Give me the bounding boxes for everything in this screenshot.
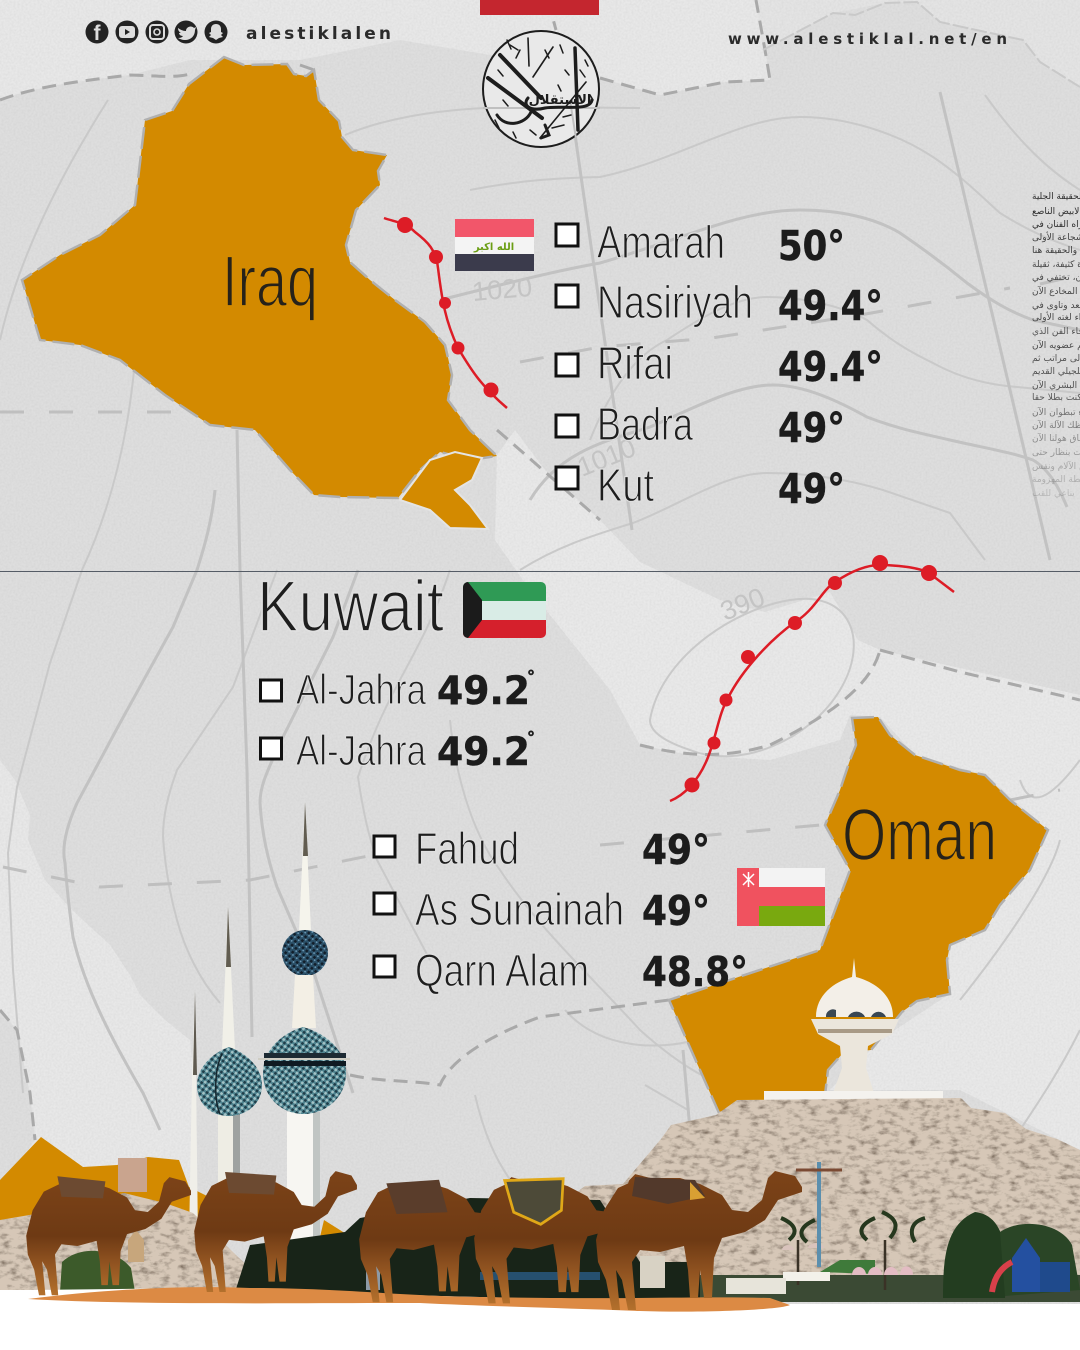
row: Al-Jahra first: ° xyxy=(527,667,535,686)
middle tower xyxy=(197,907,262,1240)
map: Iraq xyxy=(22,57,497,498)
row: Badra: Badra xyxy=(597,398,693,450)
small spire xyxy=(189,991,198,1240)
row: Qarn Alam xyxy=(374,945,748,996)
pressure labels xyxy=(471,272,769,627)
row: Kut: 49° xyxy=(778,465,845,513)
logo calligraphy roundel: الاستقلال xyxy=(529,93,591,108)
row: Rifai xyxy=(556,337,883,391)
row: Fahud xyxy=(374,823,710,874)
row: Kut xyxy=(556,459,845,513)
flag: Iraq: الله اكبر xyxy=(473,242,514,253)
row: Al-Jahra first: Al-Jahra xyxy=(296,666,426,714)
flag: Oman xyxy=(737,868,825,926)
main tower xyxy=(258,802,350,1240)
logo calligraphy roundel xyxy=(483,31,600,147)
row: Al-Jahra second: Al-Jahra xyxy=(296,727,426,775)
camel 2 xyxy=(194,1171,357,1292)
row: Kut: Kut xyxy=(597,459,654,511)
list: Oman cities xyxy=(374,823,748,996)
map: Iraq: Iraq xyxy=(222,242,318,322)
row: As Sunainah: As Sunainah xyxy=(415,884,624,935)
row: Al-Jahra second: 49.2 xyxy=(437,730,530,775)
camel 3 xyxy=(359,1177,534,1302)
map: Kuwait xyxy=(400,452,488,529)
pressure labels: 1020 xyxy=(471,272,533,307)
flag: Kuwait xyxy=(463,582,546,638)
pressure labels: 390 xyxy=(716,582,769,627)
row: Amarah xyxy=(556,216,845,270)
row: Al-Jahra first xyxy=(260,666,535,714)
row: Nasiriyah: 49.4° xyxy=(778,282,883,330)
landmark: Kuwait Towers xyxy=(189,802,350,1240)
list: Iraq cities xyxy=(556,216,883,513)
row: Qarn Alam: Qarn Alam xyxy=(415,945,589,996)
website text: www.alestiklal.net/en xyxy=(728,30,1007,48)
flag: Iraq xyxy=(455,219,534,271)
top red tab xyxy=(480,0,599,15)
camel 5 xyxy=(596,1171,802,1310)
row: Nasiriyah xyxy=(556,276,883,330)
scenery: rocky mountain xyxy=(0,1098,1080,1300)
arabic newspaper clipping xyxy=(1032,192,1080,499)
social icons xyxy=(86,20,228,45)
social icons: f xyxy=(94,22,102,45)
row: Al-Jahra second xyxy=(260,727,535,775)
pressure labels: 1010 xyxy=(573,432,640,483)
camel 4 xyxy=(474,1174,660,1303)
scenery: trees and park xyxy=(60,1158,1080,1302)
arabic newspaper clipping: يناعي للقب xyxy=(1032,489,1075,499)
row: As Sunainah: 49° xyxy=(642,887,710,935)
row: Badra xyxy=(556,398,845,452)
row: Amarah: Amarah xyxy=(597,216,725,268)
map: Oman xyxy=(669,717,1048,1113)
row: Fahud: Fahud xyxy=(415,823,519,874)
weather front: north xyxy=(384,217,507,408)
heading: Kuwait: Kuwait xyxy=(257,567,444,647)
landmark: Oman incense burner monument xyxy=(764,958,943,1100)
row: Al-Jahra first: 49.2 xyxy=(437,669,530,714)
white foot band and sand xyxy=(0,1287,1080,1350)
weather front: gulf xyxy=(670,555,954,801)
row: Al-Jahra second: ° xyxy=(527,728,535,747)
map: Oman: Oman xyxy=(842,795,997,876)
row: Qarn Alam: 48.8° xyxy=(642,948,748,996)
row: Rifai: 49.4° xyxy=(778,343,883,391)
row: Rifai: Rifai xyxy=(597,337,673,389)
camel 1 xyxy=(26,1176,191,1295)
handle text: alestiklalen xyxy=(246,24,391,44)
scenery: left gold hills xyxy=(0,1137,351,1237)
row: Badra: 49° xyxy=(778,404,845,452)
row: Amarah: 50° xyxy=(778,222,845,270)
row: Nasiriyah: Nasiriyah xyxy=(597,276,753,328)
list: Kuwait cities xyxy=(260,666,535,775)
row: Fahud: 49° xyxy=(642,826,710,874)
